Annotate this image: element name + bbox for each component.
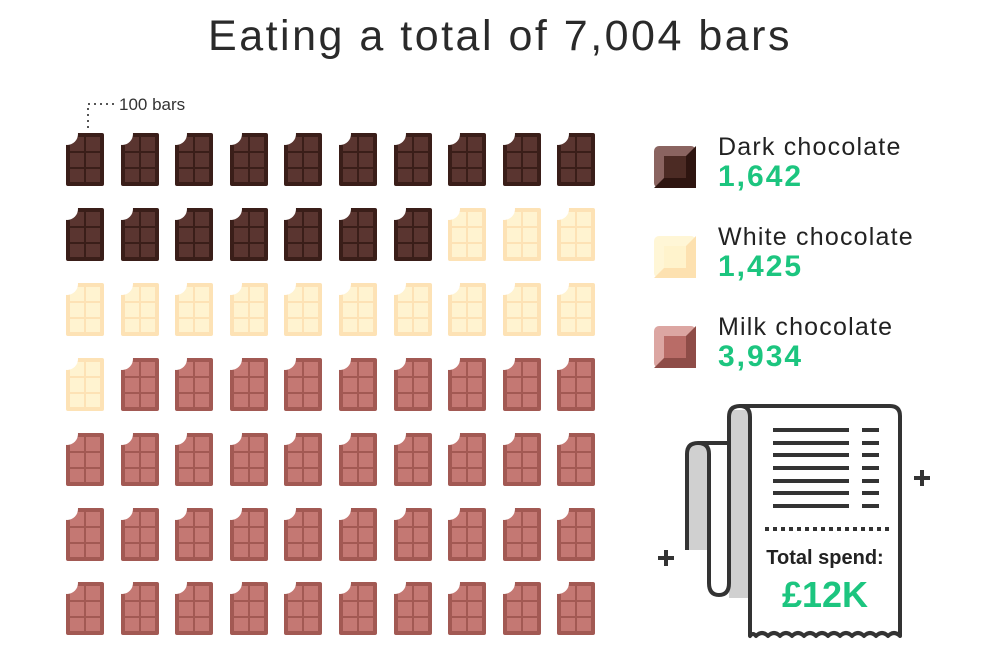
icon: white square — [654, 236, 696, 278]
legend: white: White chocolate — [718, 223, 914, 251]
total value: £12K — [782, 574, 868, 615]
paper — [740, 406, 900, 636]
legend: dark — [718, 133, 902, 193]
legend: dark: Dark chocolate — [718, 133, 902, 161]
fold outline — [687, 406, 740, 595]
bar grid — [66, 95, 595, 635]
scale annotation: 100 bars — [88, 95, 185, 128]
legend: milk — [718, 313, 893, 373]
legend: milk: 3,934 — [718, 340, 803, 373]
icon: dark square — [654, 146, 696, 188]
gray fold shading — [687, 410, 750, 598]
scale annotation: 100 bars: 100 bars — [119, 95, 185, 114]
receipt lines — [773, 428, 879, 508]
legend: dark: 1,642 — [718, 160, 803, 193]
legend: white: 1,425 — [718, 250, 803, 283]
total spend text: Total spend: — [766, 547, 884, 569]
plus signs — [658, 470, 930, 566]
receipt — [658, 404, 930, 638]
legend: white — [718, 223, 914, 283]
legend icons — [654, 146, 696, 368]
icon: milk square — [654, 326, 696, 368]
legend: milk: Milk chocolate — [718, 313, 893, 341]
title: Eating a total of 7,004 bars — [208, 12, 792, 60]
